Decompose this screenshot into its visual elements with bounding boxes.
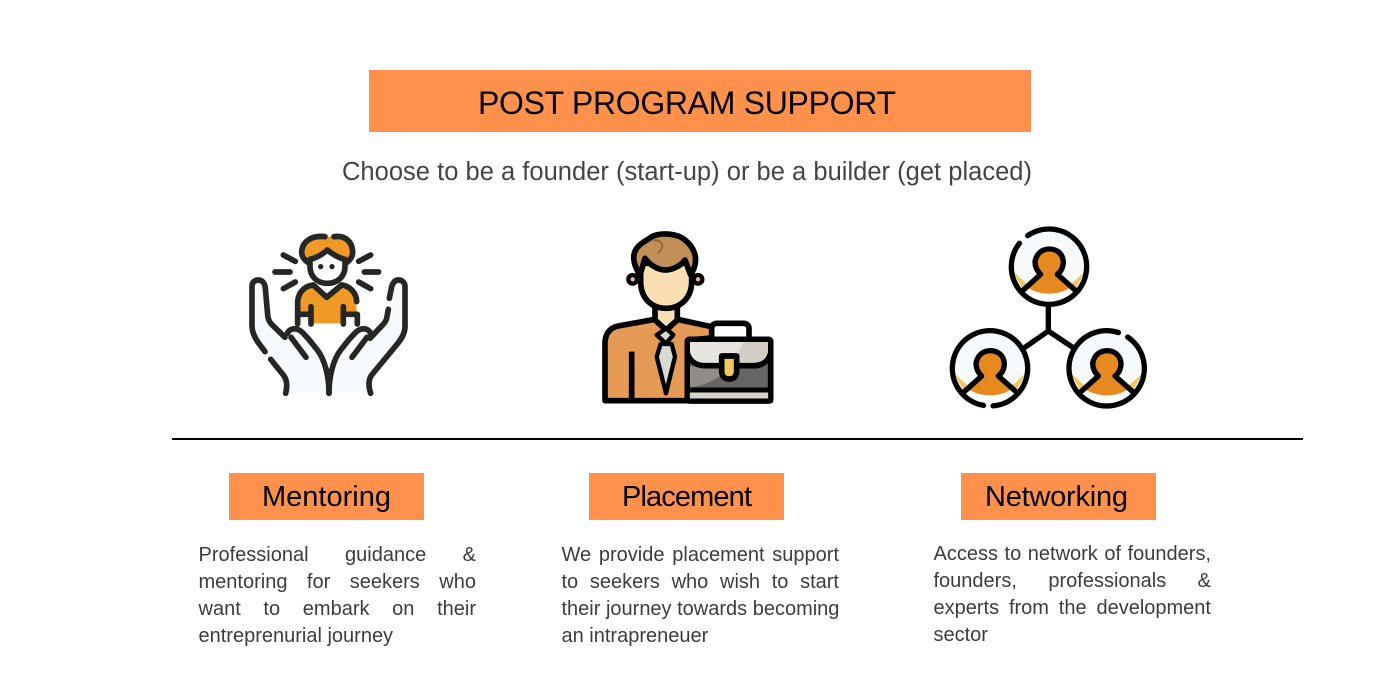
- text block: networking description: sector: [934, 624, 988, 646]
- icon: network of people: [946, 214, 1159, 421]
- text block: mentoring description: entreprenurial journey: [198, 625, 393, 647]
- text block: mentoring description: [198, 544, 476, 647]
- label: Mentoring: [229, 473, 424, 520]
- text block: mentoring description: want to embark on their: [198, 598, 476, 620]
- title banner: [369, 70, 1031, 132]
- text block: placement description: an intrapreneuer: [562, 625, 708, 647]
- text block: networking description: Access to network of founders,: [934, 543, 1211, 565]
- text block: placement description: We provide placement support: [562, 544, 839, 566]
- title banner: POST PROGRAM SUPPORT: [478, 85, 896, 121]
- left person node: [946, 325, 1034, 412]
- text block: networking description: founders, professionals &: [934, 570, 1211, 592]
- text block: mentoring description: mentoring for seekers who: [198, 571, 476, 593]
- text block: placement description: to seekers who wish to start: [562, 571, 839, 593]
- label: Networking: [961, 473, 1156, 520]
- label: Mentoring: Mentoring: [262, 481, 391, 513]
- text block: placement description: [562, 544, 839, 647]
- label: Networking: Networking: [985, 481, 1128, 513]
- text block: mentoring description: Professional guidance &: [198, 544, 476, 566]
- right person node: [1054, 316, 1159, 421]
- top person node: [997, 214, 1101, 319]
- label: Placement: Placement: [622, 481, 752, 513]
- connector lines: [1025, 305, 1073, 347]
- icon: businessman with briefcase: [605, 234, 771, 401]
- text block: placement description: their journey towards becoming: [562, 598, 839, 620]
- subtitle: Choose to be a founder (start-up) or be a builder (get placed): [342, 158, 1032, 186]
- icon: mentoring hands holding person: [252, 236, 405, 393]
- text block: networking description: [934, 543, 1211, 646]
- label: Placement: [589, 473, 784, 520]
- text block: networking description: experts from the development: [934, 597, 1211, 619]
